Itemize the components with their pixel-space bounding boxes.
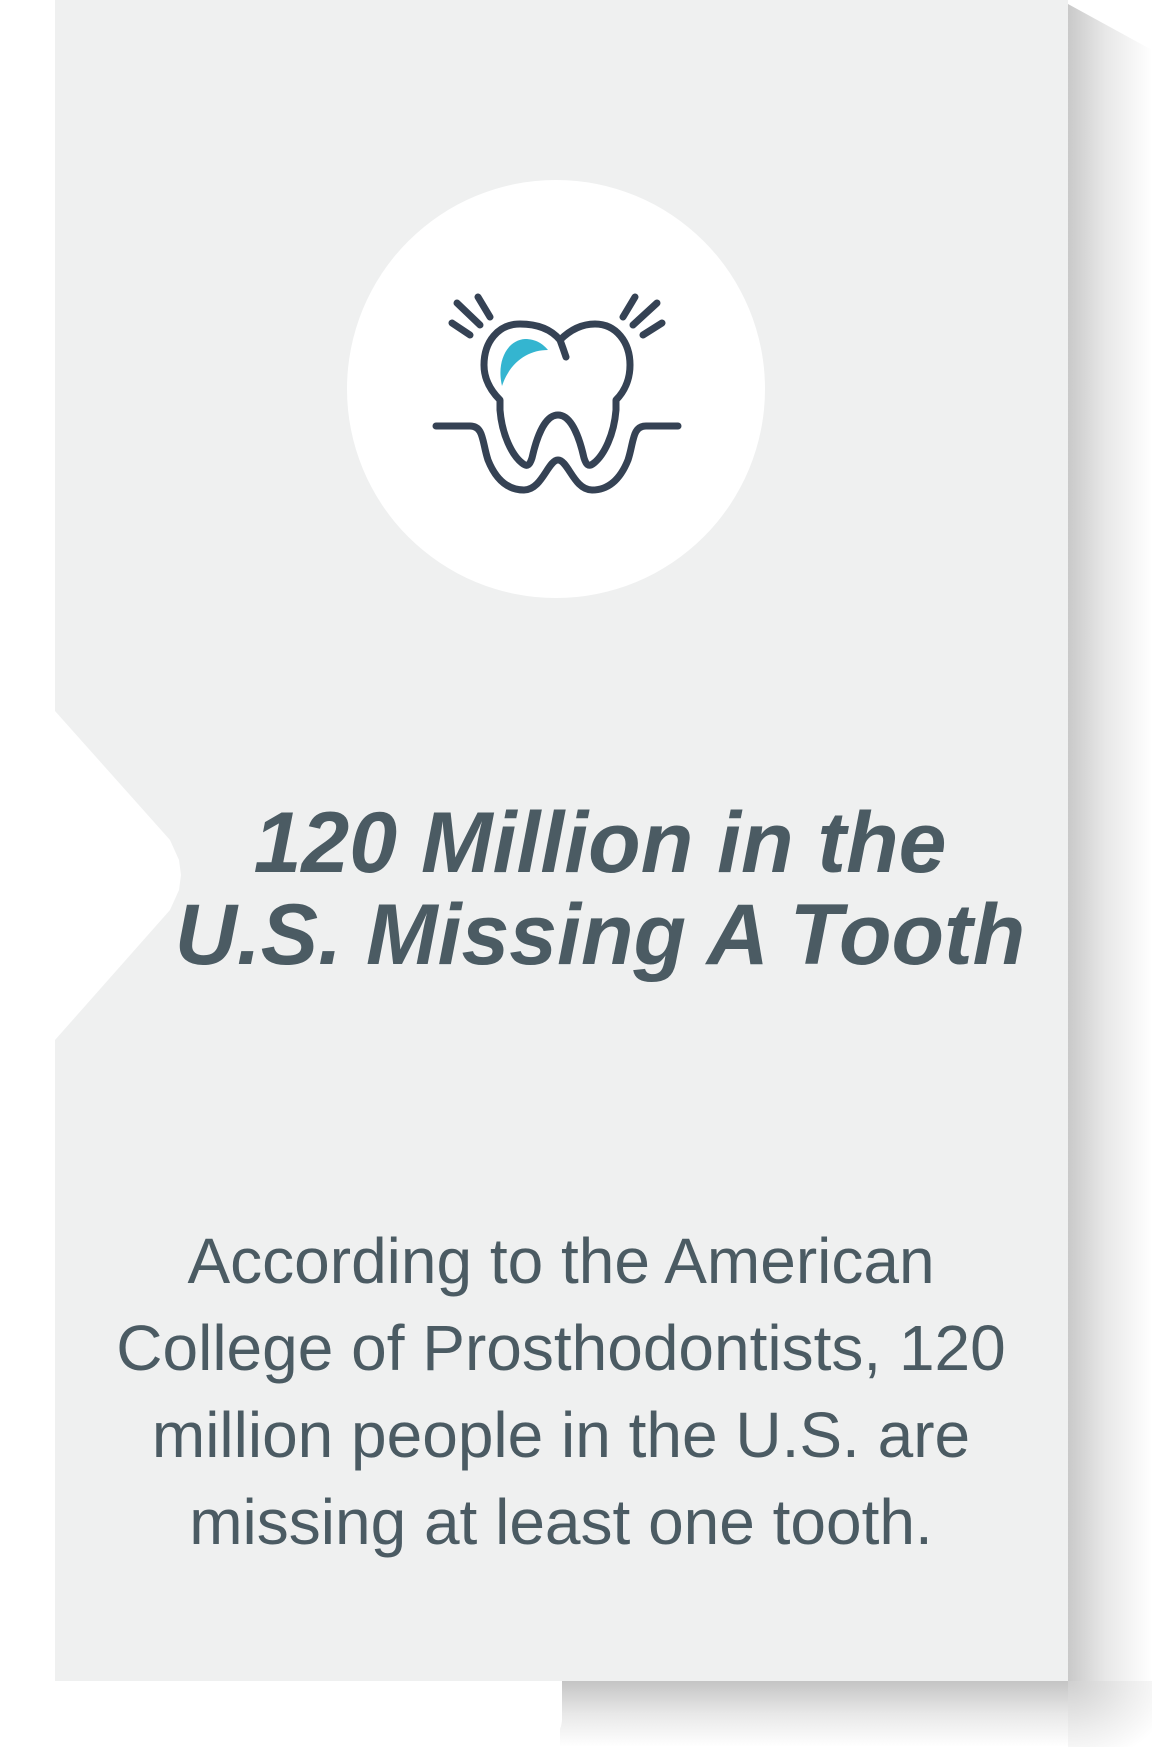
icon circle	[347, 180, 765, 598]
body text: According to the American	[187, 1225, 935, 1297]
shadow: corner	[1068, 1681, 1152, 1747]
title	[175, 795, 1025, 983]
shadow: bottom	[560, 1681, 1068, 1747]
body text: million people in the U.S. are	[152, 1399, 970, 1471]
body text: missing at least one tooth.	[189, 1486, 933, 1558]
title: U.S. Missing A Tooth	[175, 887, 1025, 983]
body text	[116, 1225, 1006, 1558]
title: 120 Million in the	[254, 795, 946, 891]
shadow: right	[1068, 4, 1136, 1681]
bottom tab	[55, 1681, 562, 1745]
icon: tooth	[432, 294, 682, 494]
body text: College of Prosthodontists, 120	[116, 1312, 1006, 1384]
